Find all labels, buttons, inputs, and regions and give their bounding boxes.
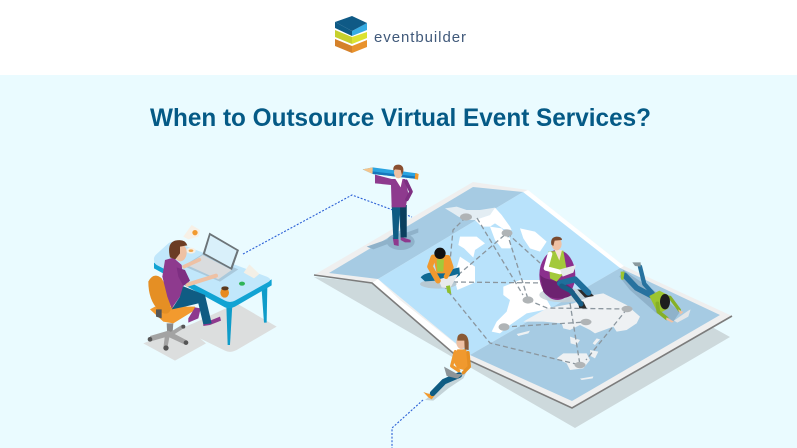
desk lamp bbox=[183, 225, 200, 254]
route nodes bbox=[460, 213, 632, 368]
person bbox=[162, 240, 221, 326]
illustration: man on purple beanbag with tablet bbox=[539, 237, 594, 308]
world continents bbox=[445, 207, 640, 380]
map panel: light centre bbox=[378, 192, 620, 355]
office chair bbox=[148, 276, 195, 351]
illustration: woman lying on map with laptop bbox=[619, 262, 691, 323]
header band bbox=[0, 0, 797, 75]
network route lines bbox=[443, 217, 627, 365]
illustration: person working at desk bbox=[143, 225, 277, 361]
laptop bbox=[183, 233, 239, 282]
desk bbox=[154, 242, 272, 345]
illustration: man holding giant pencil bbox=[363, 165, 419, 250]
map panel: top dark fold bbox=[329, 187, 523, 279]
logo wordmark: eventbuilder bbox=[374, 29, 466, 46]
icon: eventbuilder logo stack bbox=[335, 16, 367, 53]
map panel: bottom dark fold bbox=[470, 268, 720, 401]
desk shadow bbox=[143, 303, 277, 361]
illustration: woman sitting at map edge with laptop bbox=[423, 334, 469, 401]
dotted connector: woman to bottom bbox=[392, 400, 423, 448]
illustration: man sitting on map with laptop bbox=[420, 248, 460, 294]
title: When to Outsource Virtual Event Services? bbox=[150, 104, 651, 132]
dotted connector: desk to map bbox=[243, 195, 412, 254]
desk calendar bbox=[244, 264, 259, 278]
green sticky bbox=[239, 282, 245, 286]
coffee mug bbox=[220, 286, 229, 298]
illustration: folded world map bbox=[314, 182, 732, 428]
